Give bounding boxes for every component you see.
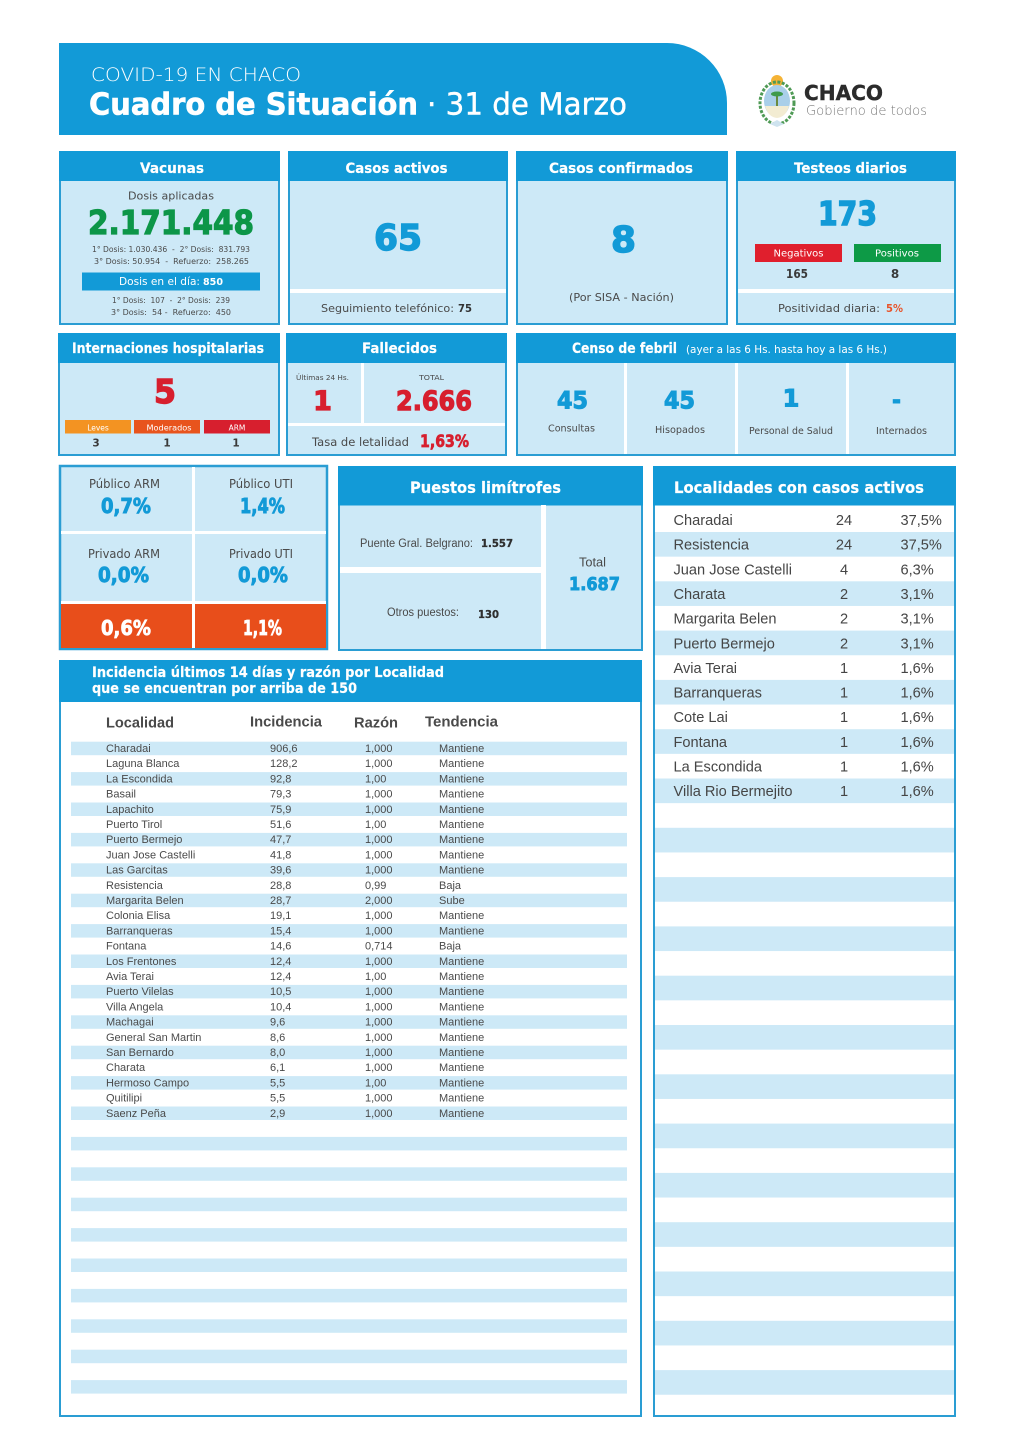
incidence table rows: Mantiene [439,986,484,998]
incidence table rows: Barranqueras [106,925,173,937]
positives tag: Positivos [875,248,919,260]
heading: Vacunas [140,161,204,177]
table header: Tendencia [425,714,499,730]
incidence table rows: 1,000 [365,758,393,770]
panel: Casos activos [288,151,508,324]
localities list: 37,5% [900,538,942,554]
stat: Público ARM: 0,7% [101,494,151,518]
icon: provincial coat of arms [760,75,794,127]
incidence table rows: 128,2 [270,758,298,770]
incidence table rows: 1,000 [365,849,393,861]
incidence table rows: Puerto Bermejo [106,834,182,846]
stat: Público ARM [89,477,160,518]
heading: que se encuentran por arriba de 150 [92,681,357,697]
negatives tag [755,244,842,262]
localities list: 1 [840,661,848,677]
heading [92,665,444,697]
incidence table rows: 10,4 [270,1001,291,1013]
Otros puestos [387,607,499,621]
incidence table rows: 1,000 [365,1017,393,1029]
heading: Localidades con casos activos [674,478,924,497]
severity values: 3 [92,438,100,450]
incidence table rows: Fontana [106,941,147,953]
localities list: 1,6% [900,784,934,800]
incidence table rows: Colonia Elisa [106,910,171,922]
last 24h deaths [296,373,349,417]
severity values: 1 [163,438,171,450]
localities list: Cote Lai [674,710,728,726]
stat: Hisopados [655,386,705,436]
incidence table rows: Mantiene [439,804,484,816]
panel: Puestos limítrofes [338,466,643,650]
incidence table rows: Mantiene [439,743,484,755]
heading: Puestos limítrofes [410,478,561,497]
label: Dosis aplicadas [128,190,214,202]
big number: 8 [611,220,636,261]
stat: Hisopados: 45 [664,386,695,414]
stat: Privado ARM [88,547,160,587]
incidence table rows: Mantiene [439,1108,484,1120]
incidence table rows: 1,000 [365,789,393,801]
incidence table rows: Mantiene [439,971,484,983]
localities list: 3,1% [900,587,934,603]
incidence table rows: Avia Terai [106,971,154,983]
Total: 1.687 [569,574,620,595]
incidence table rows: 5,5 [270,1093,285,1105]
incidence table rows: 39,6 [270,865,291,877]
total dose breakdown: 1° Dosis: 1.030.436 - 2° Dosis: 831.793 [92,244,250,254]
incidence table rows: Mantiene [439,1062,484,1074]
incidence table rows: Margarita Belen [106,895,184,907]
incidence table rows: 0,99 [365,880,386,892]
localities list: 2 [840,587,848,603]
title date: · 31 de Marzo [427,88,627,122]
incidence table rows: Charata [106,1062,146,1074]
stat: Personal de Salud: 1 [783,384,799,412]
daily doses bar: 850 [203,277,223,288]
incidence table rows: Mantiene [439,1017,484,1029]
incidence table rows: 1,000 [365,1093,393,1105]
incidence table rows: 1,00 [365,1077,386,1089]
stat: Público UTI [229,477,293,518]
localities list: Avia Terai [674,661,737,677]
daily positivity: 5% [886,303,903,315]
fatality rate: Tasa de letalidad [311,435,409,449]
panel: Fallecidos [286,333,507,455]
heading: Incidencia últimos 14 días y razón por Localidad [92,665,444,681]
daily positivity: Positividad diaria: [778,302,880,315]
incidence table rows: 1,000 [365,1108,393,1120]
stat: Privado UTI: Privado UTI [229,547,293,561]
localities list: Barranqueras [674,686,762,702]
incidence table rows: 1,000 [365,1047,393,1059]
incidence table rows: 0,714 [365,941,393,953]
incidence table rows: Mantiene [439,1047,484,1059]
incidence table rows: Mantiene [439,956,484,968]
localities list: La Escondida [674,760,763,776]
stat: Hisopados: Hisopados [655,425,705,436]
fatality rate [311,432,469,452]
incidence table rows: 6,1 [270,1062,285,1074]
incidence table rows: 12,4 [270,956,291,968]
incidence table rows: 92,8 [270,773,291,785]
stat: Personal de Salud: Personal de Salud [749,426,833,437]
tag: Moderados [134,420,200,434]
incidence table rows: 1,000 [365,1001,393,1013]
daily dose breakdown: 3° Dosis: 54 - Refuerzo: 450 [111,307,231,317]
incidence table rows: Mantiene [439,1032,484,1044]
incidence table rows: La Escondida [106,773,174,785]
incidence table rows: Saenz Peña [106,1108,167,1120]
logo: Chaco government [760,75,927,127]
localities list: 1 [840,760,848,776]
localities list: 1 [840,686,848,702]
incidence table rows: 8,0 [270,1047,285,1059]
severity values: 1 [232,438,240,450]
last 24h deaths: 1 [313,386,332,417]
Puente Gral. Belgrano: 1.557 [481,537,513,550]
daily doses bar: Dosis en el día: [119,276,200,288]
incidence table rows: Baja [439,880,462,892]
incidence table rows: Lapachito [106,804,154,816]
incidence table rows: 12,4 [270,971,291,983]
localities list: 1 [840,784,848,800]
stat: Privado UTI [229,547,293,587]
stat: Privado UTI: 0,0% [238,563,288,587]
logo wordmark: CHACO [804,81,883,105]
incidence table rows: Baja [439,941,462,953]
incidence table rows: 41,8 [270,849,291,861]
heading: Internaciones hospitalarias [72,341,264,357]
negatives tag: Negativos [774,248,824,260]
incidence table rows: 5,5 [270,1077,285,1089]
incidence table rows: 28,8 [270,880,291,892]
heading: Testeos diarios [794,161,907,177]
last 24h deaths: Últimas 24 Hs. [296,373,349,382]
incidence table rows: San Bernardo [106,1047,174,1059]
incidence table rows: Mantiene [439,834,484,846]
incidence table rows: Mantiene [439,1001,484,1013]
Puente Gral. Belgrano: Puente Gral. Belgrano: [360,538,473,550]
Total: Total [579,556,606,570]
severity values [92,438,240,450]
localities list: Charata [674,587,726,603]
incidence table rows: 2,000 [365,895,393,907]
incidence table rows: Mantiene [439,849,484,861]
incidence table rows: 75,9 [270,804,291,816]
header kicker: COVID-19 EN CHACO [91,64,301,86]
heading [572,341,887,357]
incidence table rows: Machagai [106,1017,154,1029]
incidence table rows: 15,4 [270,925,291,937]
incidence table rows: 28,7 [270,895,291,907]
stat: Privado ARM: Privado ARM [88,547,160,561]
heading: (ayer a las 6 Hs. hasta hoy a las 6 Hs.) [686,344,887,356]
incidence table rows: Villa Angela [106,1001,164,1013]
panel: Incidencia últimos 14 días [59,660,642,1416]
incidence table rows: 906,6 [270,743,298,755]
daily dose breakdown [111,295,231,317]
incidence table rows: Mantiene [439,865,484,877]
big number: 5 [154,372,176,411]
localities list: Villa Rio Bermejito [674,784,792,800]
total deaths: TOTAL [418,374,444,382]
incidence table rows: Puerto Tirol [106,819,162,831]
total UTI: 1,1% [243,616,282,640]
localities list: 24 [836,538,852,554]
localities list: 37,5% [900,513,942,529]
incidence table rows: 8,6 [270,1032,285,1044]
incidence table rows: 19,1 [270,910,291,922]
incidence table rows: Juan Jose Castelli [106,849,195,861]
incidence table rows: 1,000 [365,865,393,877]
table header [106,714,499,732]
Otros puestos: Otros puestos: [387,607,459,619]
panel: Casos confirmados [516,151,728,324]
total deaths: 2.666 [396,386,472,417]
header banner [59,43,727,135]
heading: Casos confirmados [549,161,693,177]
localities list: 6,3% [900,562,934,578]
panel: Localidades con casos activos [653,466,956,1416]
incidence table rows: 1,000 [365,1032,393,1044]
stat: Personal de Salud [749,384,833,437]
stat: Público ARM: Público ARM [89,477,160,491]
stat: Consultas: 45 [557,386,588,414]
incidence table rows: 9,6 [270,1017,285,1029]
incidence table rows: 14,6 [270,941,291,953]
logo tagline: Gobierno de todos [806,104,927,119]
daily dose breakdown: 1° Dosis: 107 - 2° Dosis: 239 [112,295,230,305]
tag: Leves: Leves [87,424,109,432]
main title: Cuadro de Situación [89,88,418,122]
positives tag [854,244,941,262]
Total [569,556,620,595]
incidence table rows: 1,000 [365,925,393,937]
heading: Fallecidos [362,341,437,357]
incidence table rows: 1,000 [365,743,393,755]
panel: Vacunas [59,151,280,324]
incidence table rows: Puerto Vilelas [106,986,174,998]
localities list: 2 [840,612,848,628]
tag: ARM: ARM [229,424,245,432]
localities list: 1 [840,710,848,726]
table header: Razón [354,716,398,732]
incidence table rows: Mantiene [439,758,484,770]
big number: 173 [818,194,877,233]
stat: Privado ARM: 0,0% [98,563,149,587]
localities list: 1,6% [900,710,934,726]
Otros puestos: 130 [478,608,499,621]
tag: ARM [204,420,270,434]
big number: 2.171.448 [88,203,254,242]
incidence table rows: Charadai [106,743,151,755]
total deaths [396,374,472,417]
daily doses bar [82,272,260,290]
stat: Internados: - [892,386,901,414]
tag: Moderados: Moderados [146,424,192,432]
incidence table rows: Mantiene [439,819,484,831]
incidence table rows: 1,000 [365,986,393,998]
stat: Consultas [548,386,595,435]
incidence table rows: Las Garcitas [106,865,168,877]
localities list: Juan Jose Castelli [674,562,792,578]
panel: Testeos diarios [736,151,956,324]
big number: 65 [374,218,422,259]
incidence table rows: Mantiene [439,773,484,785]
incidence table rows: 1,000 [365,910,393,922]
phone follow-up: Seguimiento telefónico: [321,302,454,315]
incidence table rows: 10,5 [270,986,291,998]
incidence table rows: 1,000 [365,834,393,846]
stat: Público UTI: 1,4% [240,494,285,518]
incidence table rows: 1,00 [365,971,386,983]
incidence table rows: 51,6 [270,819,291,831]
heading: Casos activos [346,161,448,177]
localities list: 1 [840,735,848,751]
incidence table rows: 1,00 [365,773,386,785]
incidence table rows: Mantiene [439,910,484,922]
incidence table rows: 1,000 [365,956,393,968]
incidence table rows: 79,3 [270,789,291,801]
table header: Localidad [106,716,174,732]
incidence table rows: Mantiene [439,1093,484,1105]
panel: Censo de febril [516,333,956,455]
incidence table rows: Los Frentones [106,956,177,968]
localities list: 1,6% [900,735,934,751]
localities list: 3,1% [900,636,934,652]
stat: Internados: Internados [876,426,927,437]
localities list: 1,6% [900,760,934,776]
incidence table rows: 2,9 [270,1108,285,1120]
incidence table rows [106,743,484,1120]
source note: (Por SISA - Nación) [569,291,674,304]
localities list: 24 [836,513,852,529]
positives value: 8 [891,267,899,281]
localities list: Margarita Belen [674,612,777,628]
localities list [674,513,942,800]
incidence table rows: Basail [106,789,136,801]
stat: Consultas: Consultas [548,424,595,435]
table header: Incidencia [250,714,323,730]
localities list: Charadai [674,513,733,529]
total dose breakdown: 3° Dosis: 50.954 - Refuerzo: 258.265 [94,256,249,266]
incidence table rows: Quitilipi [106,1093,142,1105]
localities list: 4 [840,562,848,578]
tag: Leves [65,420,131,434]
heading: Censo de febril [572,341,677,357]
incidence table rows: General San Martin [106,1032,201,1044]
stat: Público UTI: Público UTI [229,477,293,491]
incidence table rows: Mantiene [439,1077,484,1089]
incidence table rows: 47,7 [270,834,291,846]
total dose breakdown [92,244,250,266]
localities list: Resistencia [674,538,750,554]
localities list: 1,6% [900,686,934,702]
phone follow-up: 75 [458,303,472,315]
localities list: Fontana [674,735,728,751]
localities list: 2 [840,636,848,652]
fatality rate: 1,63% [420,432,469,452]
incidence table rows: 1,00 [365,819,386,831]
incidence table rows: Hermoso Campo [106,1077,189,1089]
incidence table rows: 1,000 [365,804,393,816]
total ARM: 0,6% [101,616,151,640]
localities list: Puerto Bermejo [674,636,775,652]
incidence table rows: Laguna Blanca [106,758,180,770]
incidence table rows: Mantiene [439,789,484,801]
localities list: 3,1% [900,612,934,628]
panel: ocupación ARM / UTI [60,466,327,649]
incidence table rows: Sube [439,895,465,907]
incidence table rows: Mantiene [439,925,484,937]
negatives value: 165 [786,267,808,281]
incidence table rows: Resistencia [106,880,164,892]
stat: Internados [876,386,927,437]
panel: Internaciones hospitalarias [58,333,280,455]
incidence table rows: 1,000 [365,1062,393,1074]
localities list: 1,6% [900,661,934,677]
